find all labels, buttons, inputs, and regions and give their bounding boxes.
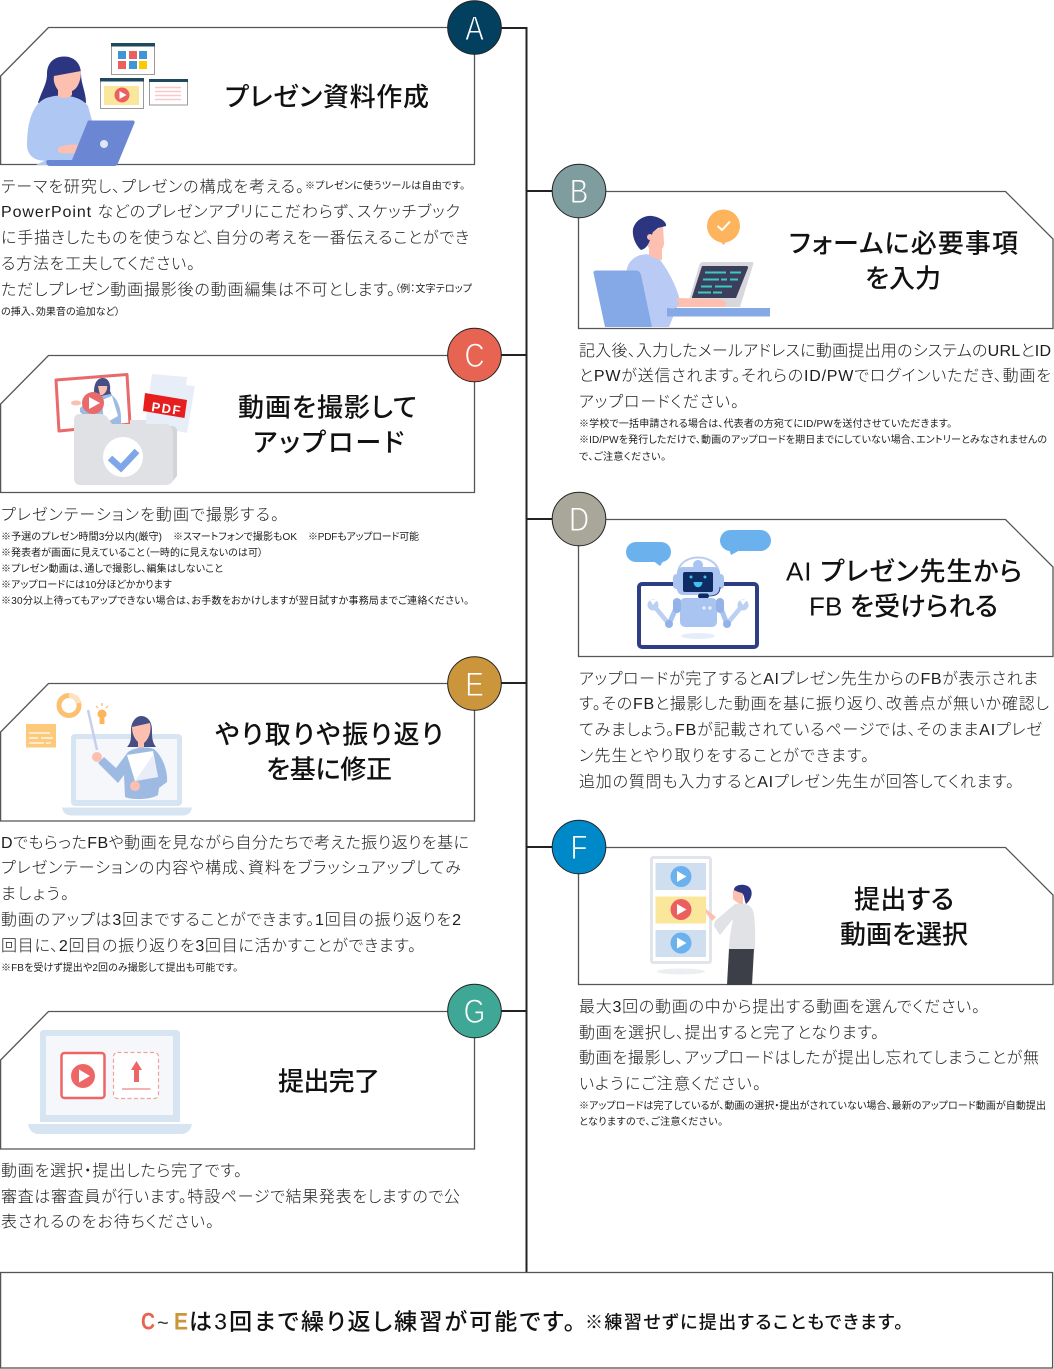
body text E: ましょう。 <box>1 886 69 903</box>
body text D: ン先生とやり取りをすることができます。 <box>579 747 869 765</box>
body text A: る方法を工夫してください。 <box>1 255 195 273</box>
body text A: PowerPoint などのプレゼンアプリにこだわらず、スケッチブック <box>1 203 460 221</box>
heading C <box>238 392 417 458</box>
body text B <box>579 342 1051 463</box>
illustration G: laptop with video and upload <box>28 1030 192 1134</box>
body text B: アップロードください。 <box>579 393 739 411</box>
body text G: 表されるのをお待ちください。 <box>1 1213 214 1231</box>
note text: は3回まで繰り返し練習が可能です。 <box>189 1308 575 1334</box>
illustration C: video, PDF and folder: PDF <box>151 399 183 418</box>
body text F: 最大3回の動画の中から提出する動画を選んでください。 <box>579 998 980 1016</box>
body text A: の挿入、効果音の追加など） <box>1 305 120 318</box>
body text E: DでもらったFBや動画を見ながら自分たちで考えた振り返りを基に <box>1 834 469 852</box>
body text D: 追加の質問も入力するとAIプレゼン先生が回答してくれます。 <box>579 773 1014 791</box>
body text C: ※スマートフォンで撮影もOK <box>173 530 297 543</box>
body text D: す。そのFBと撮影した動画を基に振り返り、改善点が無いか確認し <box>579 695 1049 713</box>
heading C: アップロード <box>253 428 404 458</box>
note text: E <box>174 1308 188 1336</box>
note frame <box>1 1272 1053 1368</box>
badge D <box>552 492 606 546</box>
body text B: ※学校で一括申請される場合は、代表者の方宛てにID/PWを送付させていただきます。 <box>579 417 952 430</box>
illustration E: teacher on laptop screen <box>26 695 192 816</box>
badge E: E <box>465 665 484 704</box>
heading G: 提出完了 <box>278 1066 380 1096</box>
body text A: ※プレゼンに使うツールは自由です。 <box>305 179 465 192</box>
body text F: 動画を選択し、提出すると完了となります。 <box>579 1024 879 1042</box>
heading D: AI プレゼン先生から <box>786 556 1022 586</box>
frame G <box>1 1012 474 1149</box>
body text E: 回目に、2回目の振り返りを3回目に活かすことができます。 <box>1 937 416 955</box>
body text F: いようにご注意ください。 <box>579 1075 761 1093</box>
body text G: 審査は審査員が行います。特設ページで結果発表をしますので公 <box>1 1188 460 1206</box>
badge G <box>448 984 501 1038</box>
badge G: G <box>464 992 485 1031</box>
panel A: presentation materials <box>1 1 501 318</box>
badge F: F <box>570 828 588 867</box>
note text: C <box>141 1308 155 1336</box>
body text C <box>1 506 469 607</box>
badge E <box>448 657 501 710</box>
body text E: ※FBを受けず提出や2回のみ撮影して提出も可能です。 <box>1 961 238 974</box>
badge A: A <box>465 9 484 48</box>
illustration D: robot with speech bubbles <box>626 530 771 647</box>
frame A <box>1 28 474 164</box>
body text F <box>579 998 1046 1128</box>
body text C: プレゼンテーションを動画で撮影する。 <box>1 506 279 524</box>
body text F: となりますので、ご注意ください。 <box>579 1115 723 1128</box>
body text G <box>1 1162 460 1231</box>
body text F: ※アップロードは完了しているが、動画の選択・提出がされていない場合、最新のアップロード動画が自動提出 <box>579 1099 1046 1112</box>
body text A: ただしプレゼン動画撮影後の動画編集は不可とします。 <box>1 281 395 299</box>
panel G: submission complete <box>1 984 501 1231</box>
heading D <box>786 556 1022 622</box>
badge B: B <box>570 172 588 211</box>
frame B <box>578 192 1053 328</box>
badge D: D <box>569 500 589 539</box>
frame F <box>578 848 1053 984</box>
panel D: AI feedback <box>552 492 1053 791</box>
body text C: ※PDFもアップロード可能 <box>308 530 419 543</box>
body text D: アップロードが完了するとAIプレゼン先生からのFBが表示されま <box>579 670 1038 688</box>
heading B: を入力 <box>865 264 941 294</box>
body text C: ※予選のプレゼン時間3分以内(厳守) <box>1 530 162 543</box>
heading F <box>840 884 968 950</box>
body text E <box>1 834 469 974</box>
body text F: 動画を撮影し、アップロードはしたが提出し忘れてしまうことが無 <box>579 1049 1039 1067</box>
panel B: form entry <box>552 164 1053 463</box>
body text E: プレゼンテーションの内容や構成、資料をブラッシュアップしてみ <box>1 859 461 877</box>
illustration C: video, PDF and folder <box>56 374 195 485</box>
body text C: ※30分以上待ってもアップできない場合は、お手数をおかけしますが翌日試すか事務局までご連絡ください。 <box>1 594 469 607</box>
body text B: 記入後、入力したメールアドレスに動画提出用のシステムのURLとID <box>579 342 1051 360</box>
frame E <box>1 684 474 821</box>
heading F: 動画を選択 <box>840 920 968 950</box>
body text A <box>1 178 472 318</box>
badge A <box>448 1 501 54</box>
badge F <box>552 820 606 874</box>
heading B <box>789 228 1018 294</box>
heading E: を基に修正 <box>266 754 392 784</box>
body text D <box>579 670 1049 791</box>
body text C: ※プレゼン動画は、通しで撮影し、編集はしないこと <box>1 562 223 575</box>
heading A: プレゼン資料作成 <box>225 82 429 112</box>
frame D <box>578 520 1053 656</box>
body text C: ※発表者が画面に見えていること（一時的に見えないのは可） <box>1 546 263 559</box>
heading E <box>215 720 443 784</box>
body text A: に手描きしたものを使うなど、自分の考えを一番伝えることができ <box>1 229 469 247</box>
note box: practice up to 3 times <box>1 1272 1053 1368</box>
illustration A: woman with laptop and windows <box>27 43 188 166</box>
body text E: 動画のアップは3回まですることができます。1回目の振り返りを2 <box>1 911 461 929</box>
body text B: とPWが送信されます。それらのID/PWでログインいただき、動画を <box>579 367 1051 385</box>
heading E: やり取りや振り返り <box>215 720 443 750</box>
body text B: で、ご注意ください。 <box>579 450 666 463</box>
panel F: select video <box>552 820 1053 1128</box>
heading F: 提出する <box>854 884 954 914</box>
note text: ※練習せずに提出することもできます。 <box>585 1312 903 1332</box>
panel C: record and upload <box>1 328 501 607</box>
body text B: ※ID/PWを発行しただけで、動画のアップロードを期日までにしていない場合、エントリーとみなされませんの <box>579 433 1047 446</box>
illustration B: man at laptop <box>593 210 770 327</box>
badge B <box>552 164 606 218</box>
note text: ~ <box>157 1312 169 1334</box>
note text <box>141 1308 903 1336</box>
body text A: テーマを研究し、プレゼンの構成を考える。 <box>1 178 304 196</box>
badge C <box>448 328 501 382</box>
body text C: ※アップロードには10分ほどかかります <box>1 579 172 591</box>
timeline connector <box>500 27 553 1273</box>
illustration F: man choosing video on tablet <box>652 858 755 985</box>
body text G: 動画を選択・提出したら完了です。 <box>1 1162 242 1180</box>
heading B: フォームに必要事項 <box>789 228 1018 258</box>
heading C: 動画を撮影して <box>238 392 417 422</box>
heading D: FB を受けられる <box>809 592 998 622</box>
frame C <box>1 356 474 492</box>
badge C: C <box>464 336 485 375</box>
panel E: revise from feedback <box>1 657 501 974</box>
body text A: （例：文字テロップ <box>395 282 472 295</box>
body text D: てみましょう。FBが記載されているページでは、そのままAIプレゼ <box>579 721 1043 739</box>
